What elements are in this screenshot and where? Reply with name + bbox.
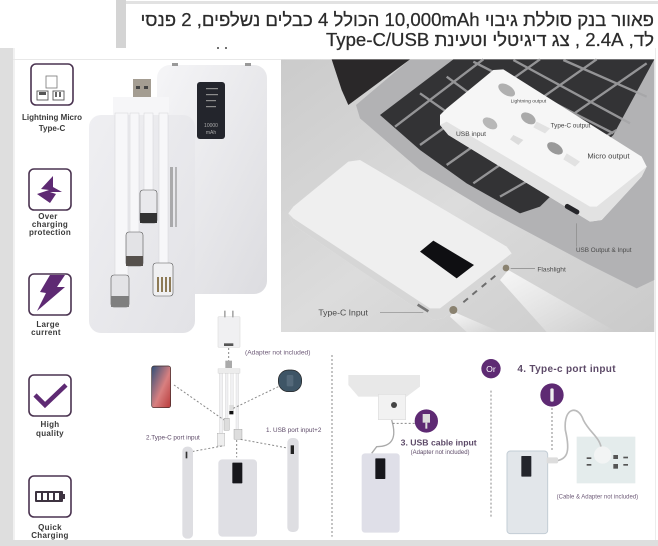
callouts on photo: Lightning output — [511, 99, 547, 105]
icon: connectors — [31, 64, 73, 105]
icon: quick charging battery — [29, 476, 71, 517]
label: large current: current — [31, 328, 61, 337]
power bank front — [218, 459, 257, 537]
label: lightning micro type-c — [22, 113, 82, 133]
icon: over charging protection — [29, 169, 71, 210]
label: high quality: High — [41, 420, 59, 429]
dashed connector lines — [174, 355, 332, 537]
label: usb cable input: (Adapter not included) — [411, 450, 470, 456]
power bank: top with cables — [440, 69, 647, 222]
photo: power banks on laptop — [281, 59, 654, 332]
title: פאוור בנק סוללת גיבוי 10,000mAh הכולל 4 כבלים נשלפים, 2 פנסי — [140, 9, 654, 30]
laptop body — [332, 59, 654, 288]
icon: smartphone — [152, 366, 171, 408]
label: usb cable input — [401, 437, 477, 456]
wall adapter — [218, 311, 240, 347]
label: lightning micro type-c: Lightning Micro — [22, 113, 82, 122]
label: high quality: quality — [36, 429, 64, 438]
title — [140, 9, 654, 50]
product: power bank back view: mAh — [206, 130, 216, 136]
label: over charging protection — [29, 212, 71, 237]
usb adapter socket — [348, 375, 420, 453]
beams of light — [450, 270, 617, 332]
icon: usb plug badge — [415, 409, 438, 433]
heading: type-c port input: 4. Type-c port input — [517, 364, 616, 375]
callouts on photo — [318, 99, 632, 317]
icon: or badge — [481, 359, 501, 378]
note: cable and adapter: (Cable & Adapter not included) — [557, 494, 638, 500]
label: lightning micro type-c: Type-C — [39, 124, 65, 133]
power bank side right — [287, 438, 299, 532]
callouts on photo: USB Output & Input — [576, 247, 632, 254]
power bank side left — [182, 447, 193, 539]
icon: type-c cable badge — [540, 383, 564, 452]
icon: or badge: Or — [486, 364, 496, 374]
label: over charging protection: Over — [38, 212, 58, 221]
wall socket with cable — [547, 410, 635, 483]
diagram: usb and type-c input — [332, 355, 638, 537]
callouts on photo: Flashlight — [537, 267, 566, 274]
diagram: charging devices from one power bank: 1. USB port input+2 — [266, 427, 322, 434]
callouts on photo: Type-C output — [551, 123, 591, 130]
diagram: charging devices from one power bank — [146, 311, 332, 539]
callouts on photo: Type-C Input — [318, 307, 368, 317]
label: large current: Large — [36, 320, 60, 329]
icon: high quality — [29, 375, 71, 416]
diagram: charging devices from one power bank: (Adapter not included) — [245, 350, 310, 357]
callouts on photo: Micro output — [587, 152, 630, 161]
labels: 2.Type-C port input — [146, 434, 200, 441]
power bank: type-c input — [507, 451, 548, 534]
product: power bank back view — [157, 63, 267, 294]
label: large current — [31, 320, 61, 337]
callouts on photo: USB input — [456, 131, 486, 138]
label: high quality — [36, 420, 64, 438]
product: power bank back view: 10000 — [204, 123, 218, 129]
cable bundle — [217, 361, 242, 446]
title: לד, 2.4A , צג דיגיטלי וטעינת Type-C/USB — [326, 28, 654, 50]
icon: earbud case — [278, 370, 302, 392]
icon: large current — [29, 274, 71, 315]
label: usb cable input: 3. USB cable input — [401, 437, 477, 447]
label: quick charging: Charging — [31, 531, 69, 540]
product: power bank with four cables — [89, 79, 195, 333]
power bank: usb input — [362, 453, 400, 533]
label: over charging protection: protection — [29, 228, 71, 237]
label: quick charging — [31, 523, 69, 540]
power bank: display front — [288, 160, 512, 320]
label: over charging protection: charging — [32, 220, 68, 229]
label: quick charging: Quick — [38, 523, 62, 532]
